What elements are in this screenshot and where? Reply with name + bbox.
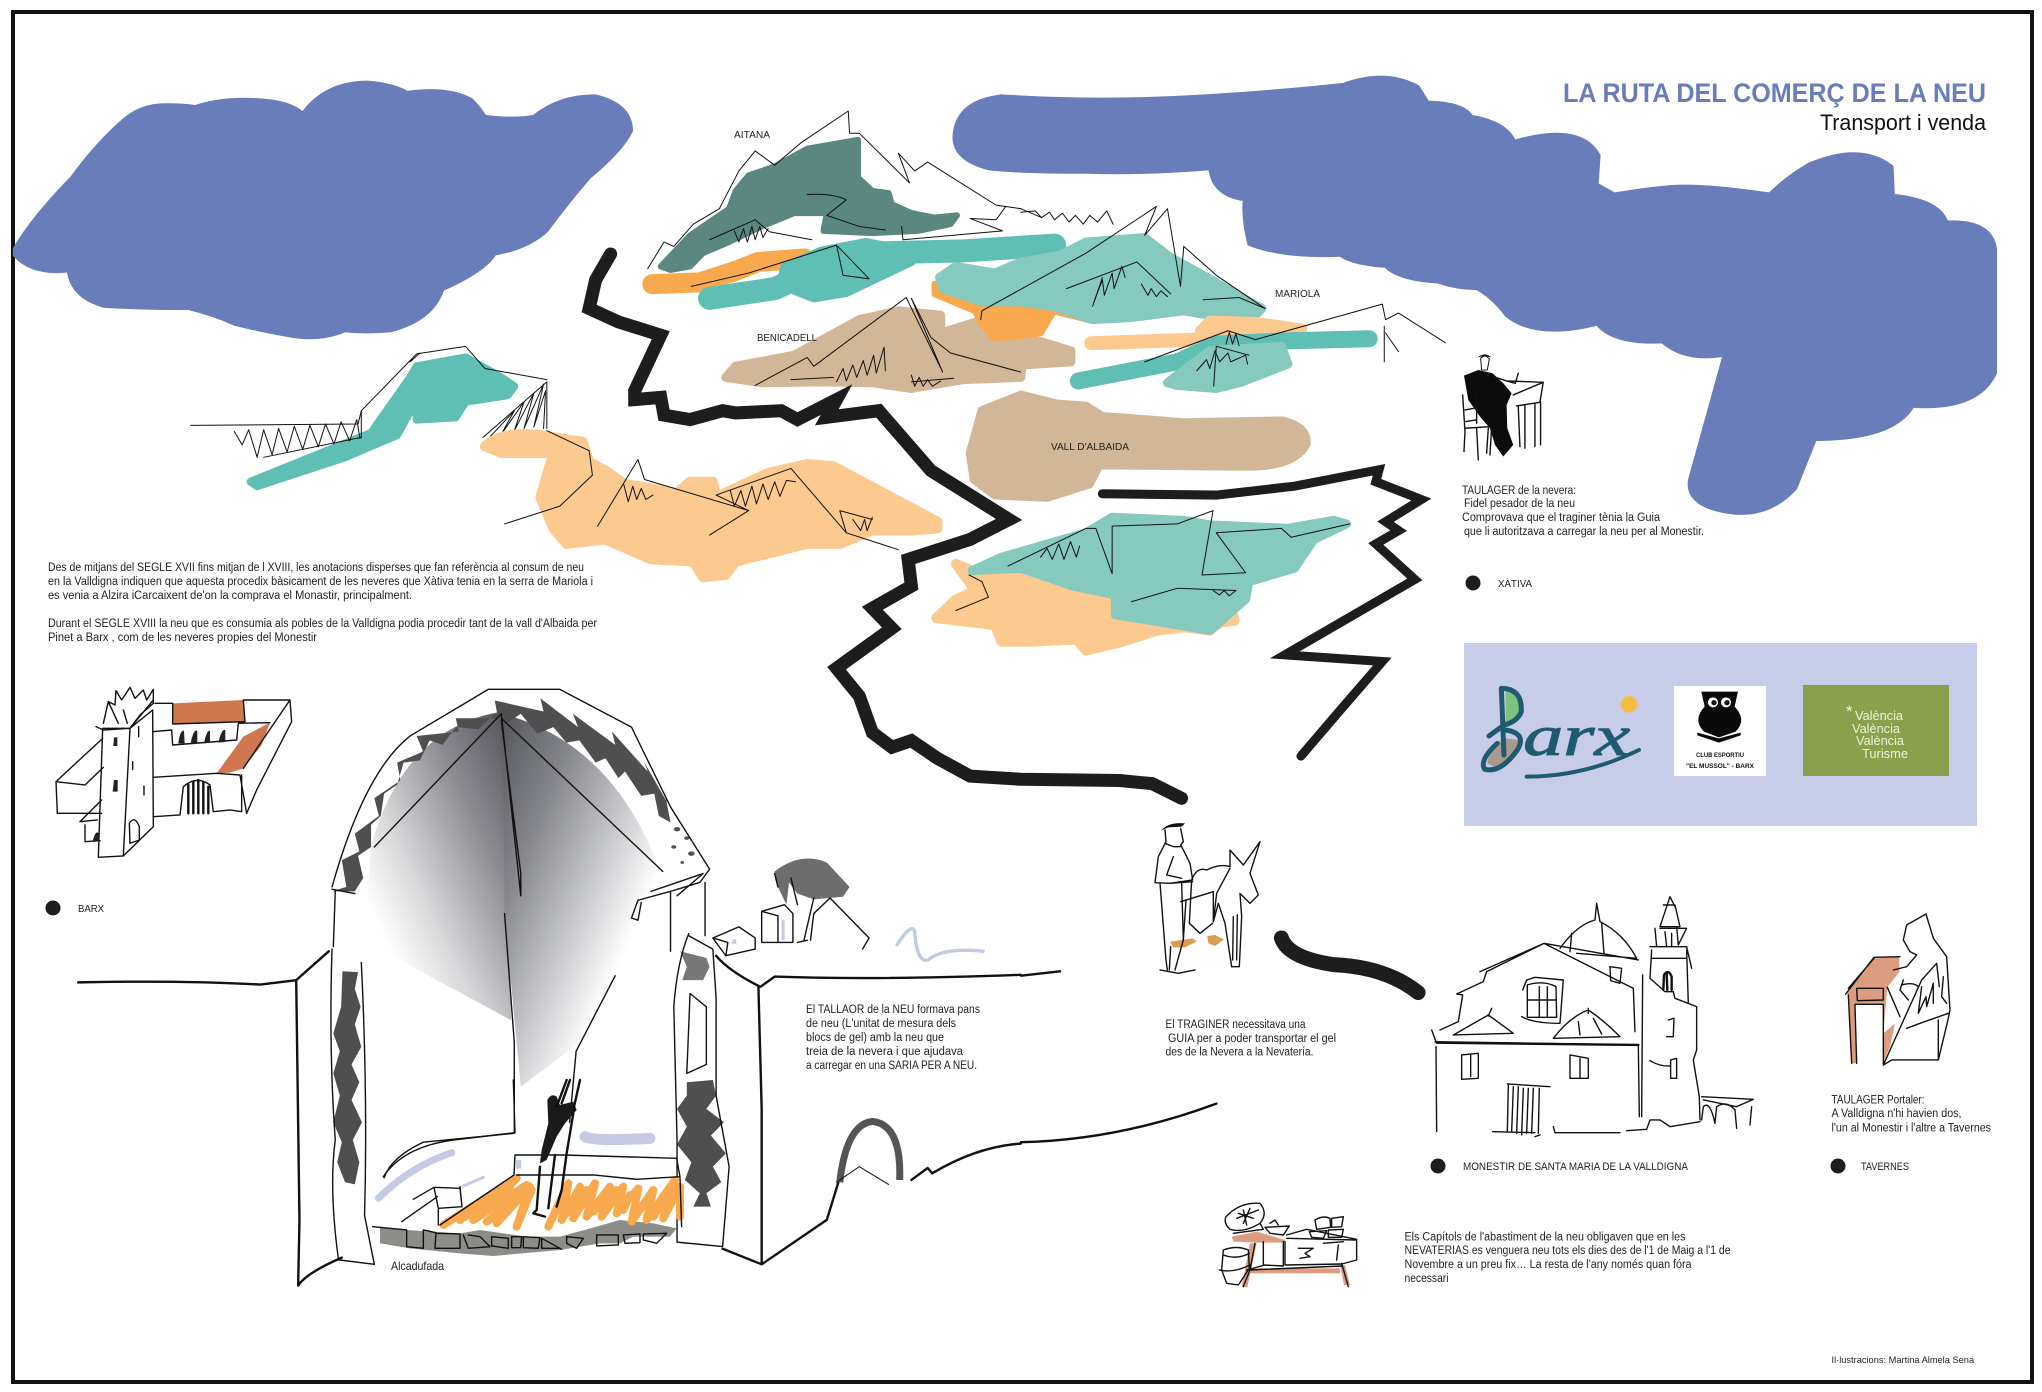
intro text block: Des de mitjans del SEGLE XVII fins mitjan de l XVIII, les anotacions disperses que fan referència al consum de neu xyxy=(48,562,584,574)
caption: Taulager de la nevera: Fidel pesador de la neu xyxy=(1464,498,1575,510)
caption: Els Capítols xyxy=(1404,1232,1730,1285)
icon: seated scribe at desk xyxy=(1463,354,1543,460)
logo: Barx: arx xyxy=(1523,706,1630,768)
label: Aitana: AITANA xyxy=(734,129,770,141)
logo: València Turisme: València xyxy=(1856,733,1905,748)
figure: muleteer with mule xyxy=(1155,823,1260,973)
location: Monastery xyxy=(1430,1158,1689,1174)
caption: El Tallaor: El TALLAOR de la NEU formava pans xyxy=(806,1004,980,1016)
caption: El Traginer xyxy=(1166,1019,1336,1058)
location: Monastery: MONESTIR DE SANTA MARIA DE LA VALLDIGNA xyxy=(1463,1161,1689,1173)
figure: snow cutter with blocks xyxy=(713,859,983,960)
mountain: Mariola upper xyxy=(935,206,1265,338)
logo: Club Esportiu El Mussol: "EL MUSSOL" - BARX xyxy=(1686,763,1755,770)
logo: València Turisme: * xyxy=(1846,702,1853,721)
panel: sponsors logos xyxy=(1464,643,1977,826)
illustration: snow seller's stall xyxy=(1219,1203,1357,1287)
ground line: right extension xyxy=(1021,971,1216,1142)
well walls xyxy=(333,971,362,1184)
logo: València Turisme: València xyxy=(1852,721,1901,736)
location: Barx xyxy=(46,900,104,916)
mountain: Aitana xyxy=(648,111,1113,270)
intro text block: Pinet a Barx , com de les neveres propies del Monestir xyxy=(48,632,317,644)
caption: El Tallaor: treia de la nevera i que ajudava xyxy=(806,1046,964,1058)
label: Mariola: MARIOLA xyxy=(1275,288,1320,300)
subtitle: Transport i venda xyxy=(1820,110,1987,135)
caption: El Tallaor: de neu (L'unitat de mesura dels xyxy=(806,1018,956,1030)
vault gradient right xyxy=(503,714,664,1087)
location: Tavernes xyxy=(1830,1158,1909,1174)
logo: València Turisme: Turisme xyxy=(1862,746,1908,761)
label: Alcadufada: Alcadufada xyxy=(391,1259,444,1273)
credit: Il·lustracions: Martina Almela Sena xyxy=(1832,1355,1975,1366)
caption: Els Capítols: Els Capítols de l'abastiment de la neu obligaven que en les xyxy=(1404,1232,1686,1244)
illustration: Monastery of Santa Maria de la Valldigna xyxy=(1432,897,1753,1137)
label: Vall d'Albaida: VALL D'ALBAIDA xyxy=(1051,441,1129,453)
mountain labels xyxy=(734,129,1320,453)
caption: Taulager Portaler: l'un al Monestir i l'altre a Tavernes xyxy=(1832,1122,1991,1134)
mountain: Vall d'Albaida tan shape xyxy=(970,395,1306,497)
black route: Xàtiva branch xyxy=(1102,470,1421,756)
caption: Taulager de la nevera: TAULAGER de la nevera: xyxy=(1462,485,1576,497)
logo: Club Esportiu El Mussol xyxy=(1674,686,1766,776)
distant arch xyxy=(840,1121,900,1182)
blue cloud right xyxy=(954,77,1996,513)
mountain: Mariola lower xyxy=(1078,304,1445,388)
black route: Barx to Monastery xyxy=(589,254,1182,798)
caption: El Tallaor: a carregar en una SARIA PER A NEU. xyxy=(806,1060,977,1072)
intro text block: Durant el SEGLE XVIII la neu que es consumia als pobles de la Valldigna podia procedir tant de la vall d'Albaida per xyxy=(48,618,597,630)
caption: Els Capítols: Novembre a un preu fix… La resta de l'any només quan fóra xyxy=(1404,1259,1692,1271)
intro text block: en la Valldigna indiquen que aquesta procedix bàsicament de les neveres que Xàtiva tenia en la serra de Mariola i xyxy=(48,576,593,588)
caption: El Traginer: El TRAGINER necessitava una xyxy=(1166,1019,1306,1031)
intro text block: es venia a Alzira iCarcaixent de'on la comprava el Monastir, principalment. xyxy=(48,590,412,602)
intro text block xyxy=(48,562,597,644)
location: Tavernes: TAVERNES xyxy=(1861,1161,1909,1173)
caption: Taulager de la nevera: que li autoritzava a carregar la neu per al Monestir. xyxy=(1464,526,1704,538)
caption: Els Capítols: necessari xyxy=(1404,1273,1448,1285)
mountain: Benicadell xyxy=(726,297,1071,388)
black route: to Monastery xyxy=(1281,938,1418,993)
illustration: seated vendor at Taulager Portaler xyxy=(1846,914,1950,1065)
vault ribs xyxy=(374,714,703,1178)
snow floor of the well xyxy=(373,1080,682,1256)
illustration: snow well cross-section xyxy=(78,689,1021,1286)
location: Barx: BARX xyxy=(78,903,104,915)
caption: El Traginer: des de la Nevera a la Nevatería. xyxy=(1166,1046,1314,1058)
logo: València Turisme xyxy=(1803,685,1949,776)
logo: Barx xyxy=(1483,688,1639,777)
vault rim xyxy=(332,698,671,891)
caption: El Tallaor: blocs de gel) amb la neu que xyxy=(806,1032,944,1044)
caption: El Traginer: GUIA per a poder transportar el gel xyxy=(1168,1033,1336,1045)
vault speckle xyxy=(671,827,695,864)
logo: València Turisme: València xyxy=(1855,708,1904,723)
ground left xyxy=(78,951,342,1286)
logo: Club Esportiu El Mussol: CLUB ESPORTIU xyxy=(1696,752,1744,759)
location: Xàtiva xyxy=(1466,576,1532,590)
vault gradient left xyxy=(365,712,511,1020)
caption: Taulager de la nevera: Comprovava que el traginer tènia la Guia xyxy=(1462,512,1661,524)
blue cloud left xyxy=(14,82,631,338)
illustration: Barx monastery building xyxy=(56,687,292,857)
location: Xàtiva: XÀTIVA xyxy=(1498,577,1532,590)
caption: Taulager Portaler xyxy=(1832,1094,1991,1134)
mountain: orange and teal band xyxy=(652,242,1055,298)
figure: worker in the well xyxy=(533,1080,580,1217)
caption: Taulager Portaler: TAULAGER Portaler: xyxy=(1832,1094,1924,1106)
mountain: left teal peak xyxy=(191,346,547,486)
mountain: peach ridge xyxy=(485,431,937,577)
ground right xyxy=(716,956,1021,1264)
caption: Taulager Portaler: A Valldigna n'hi havien dos, xyxy=(1832,1108,1962,1120)
caption: Taulager de la nevera xyxy=(1462,485,1704,538)
mountain: Xàtiva range xyxy=(936,511,1350,650)
caption: Els Capítols: NEVATERIAS es venguera neu tots els dies des de l'1 de Maig a l'1 de xyxy=(1404,1245,1730,1257)
label: Benicadell: BENICADELL xyxy=(757,332,817,344)
title: LA RUTA DEL COMERÇ DE LA NEU xyxy=(1563,78,1986,108)
caption: El Tallaor xyxy=(806,1004,980,1072)
